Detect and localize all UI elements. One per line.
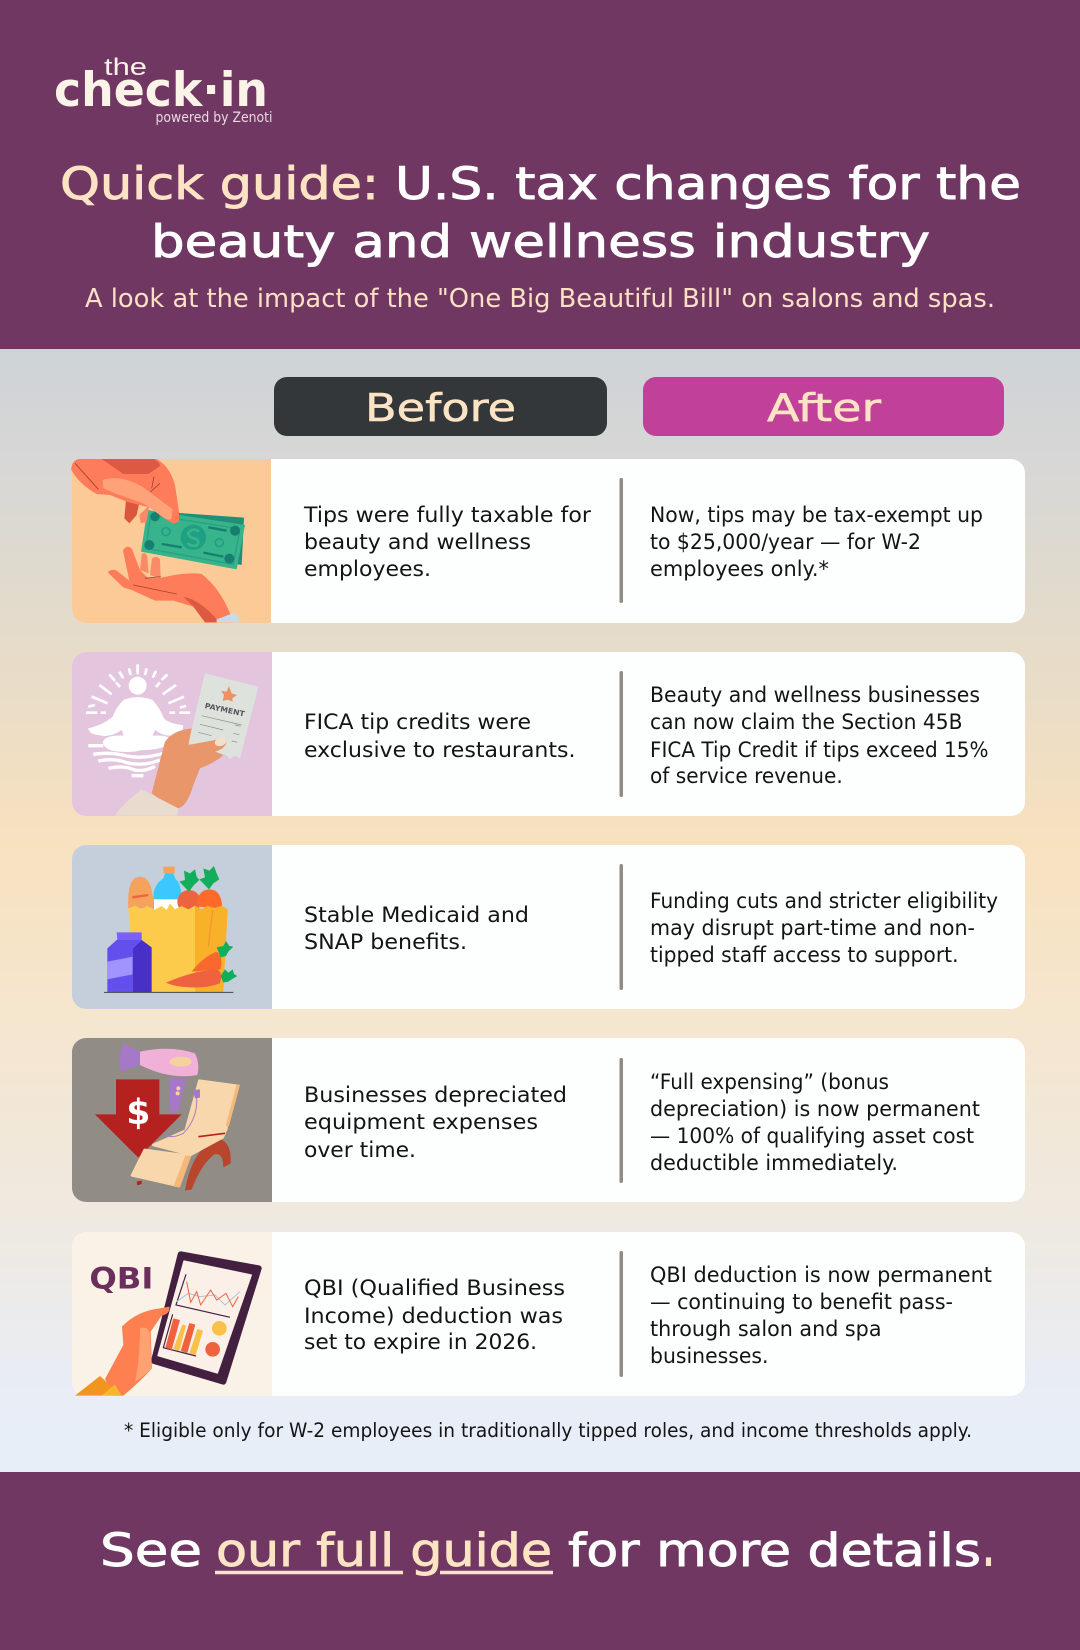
after text (650, 683, 988, 789)
column heading: Before (274, 377, 607, 436)
column heading: After: After (767, 386, 881, 431)
row 3: Medicaid and SNAP (72, 845, 1025, 1009)
icon: hands exchanging money (71, 459, 245, 622)
before text: over time. (304, 1138, 416, 1163)
before text (304, 710, 576, 763)
after text: deductible immediately. (650, 1151, 898, 1176)
title: U.S. tax changes for the (395, 159, 1021, 210)
after text: — 100% of qualifying asset cost (650, 1124, 974, 1149)
divider (620, 478, 623, 603)
icon: hair dryer, falling dollar arrow and spa chair: $ (126, 1093, 150, 1133)
row 1: tips (71, 459, 1025, 623)
before text: exclusive to restaurants. (304, 738, 576, 763)
after text: Beauty and wellness businesses (650, 683, 980, 708)
after text: businesses. (650, 1344, 768, 1369)
before text: employees. (304, 557, 431, 582)
after text (650, 1263, 992, 1369)
after text: to $25,000/year — for W-2 (650, 530, 921, 555)
title: Quick guide: (60, 159, 379, 210)
after text: tipped staff access to support. (650, 943, 959, 968)
after text: can now claim the Section 45B (650, 710, 962, 735)
call to action: See (100, 1524, 202, 1577)
icon: meditating figure and payment receipt: PAYMENT (204, 701, 246, 718)
after text: may disrupt part-time and non- (650, 916, 975, 941)
after text: depreciation) is now permanent (650, 1097, 980, 1122)
before text: equipment expenses (304, 1110, 538, 1135)
call to action: for more details (568, 1524, 981, 1577)
divider (620, 671, 623, 797)
before text: FICA tip credits were (304, 710, 531, 735)
before text: set to expire in 2026. (304, 1330, 537, 1355)
icon: meditating figure and payment receipt (86, 664, 258, 816)
gradient content background (0, 349, 1080, 1472)
before text: SNAP benefits. (304, 930, 467, 955)
footnote: * Eligible only for W-2 employees in traditionally tipped roles, and income thresholds apply. (124, 1419, 972, 1442)
row 4: equipment depreciation (72, 1038, 1025, 1202)
footer band (0, 1472, 1080, 1650)
before text: beauty and wellness (304, 530, 531, 555)
after text (650, 503, 983, 582)
before text (304, 1083, 567, 1163)
logo: the check-in powered by Zenoti: powered by Zenoti (156, 110, 272, 126)
header band (0, 0, 1080, 349)
after text: — continuing to benefit pass- (650, 1290, 953, 1315)
icon: QBI tablet with charts: QBI (89, 1261, 153, 1295)
after text: QBI deduction is now permanent (650, 1263, 992, 1288)
after text: through salon and spa (650, 1317, 882, 1342)
before text: Tips were fully taxable for (303, 503, 591, 528)
row 5: QBI deduction (72, 1232, 1025, 1396)
icon: hair dryer, falling dollar arrow and spa chair (95, 1043, 240, 1191)
before text: Income) deduction was (304, 1304, 563, 1329)
before text: QBI (Qualified Business (304, 1276, 565, 1301)
column heading: Before: Before (365, 386, 516, 431)
after text: “Full expensing” (bonus (650, 1070, 889, 1095)
call to action (100, 1524, 994, 1577)
call to action: our full guide (216, 1524, 552, 1577)
after text: FICA Tip Credit if tips exceed 15% (650, 738, 988, 763)
call to action: . (983, 1524, 994, 1577)
after text: of service revenue. (650, 764, 843, 789)
divider (620, 1058, 623, 1183)
after text (650, 889, 998, 968)
logo: the check-in powered by Zenoti: check·in (54, 63, 268, 118)
divider (620, 1251, 623, 1377)
title (60, 159, 1021, 268)
after text: Now, tips may be tax-exempt up (650, 503, 983, 528)
before text (303, 503, 591, 582)
after text: employees only.* (650, 557, 829, 582)
after text: Funding cuts and stricter eligibility (650, 889, 998, 914)
before text (304, 903, 529, 955)
subtitle: A look at the impact of the "One Big Beautiful Bill" on salons and spas. (85, 284, 995, 314)
divider (620, 864, 623, 990)
row 2: FICA tip credit (72, 652, 1025, 816)
before text (304, 1276, 565, 1355)
logo: the check-in powered by Zenoti: the (104, 54, 147, 81)
before text: Businesses depreciated (304, 1083, 567, 1108)
icon: grocery bag (104, 866, 237, 992)
title: beauty and wellness industry (151, 217, 930, 268)
before text: Stable Medicaid and (304, 903, 529, 928)
column heading: After (643, 377, 1004, 436)
after text (650, 1070, 980, 1176)
icon: QBI tablet with charts (75, 1254, 259, 1396)
